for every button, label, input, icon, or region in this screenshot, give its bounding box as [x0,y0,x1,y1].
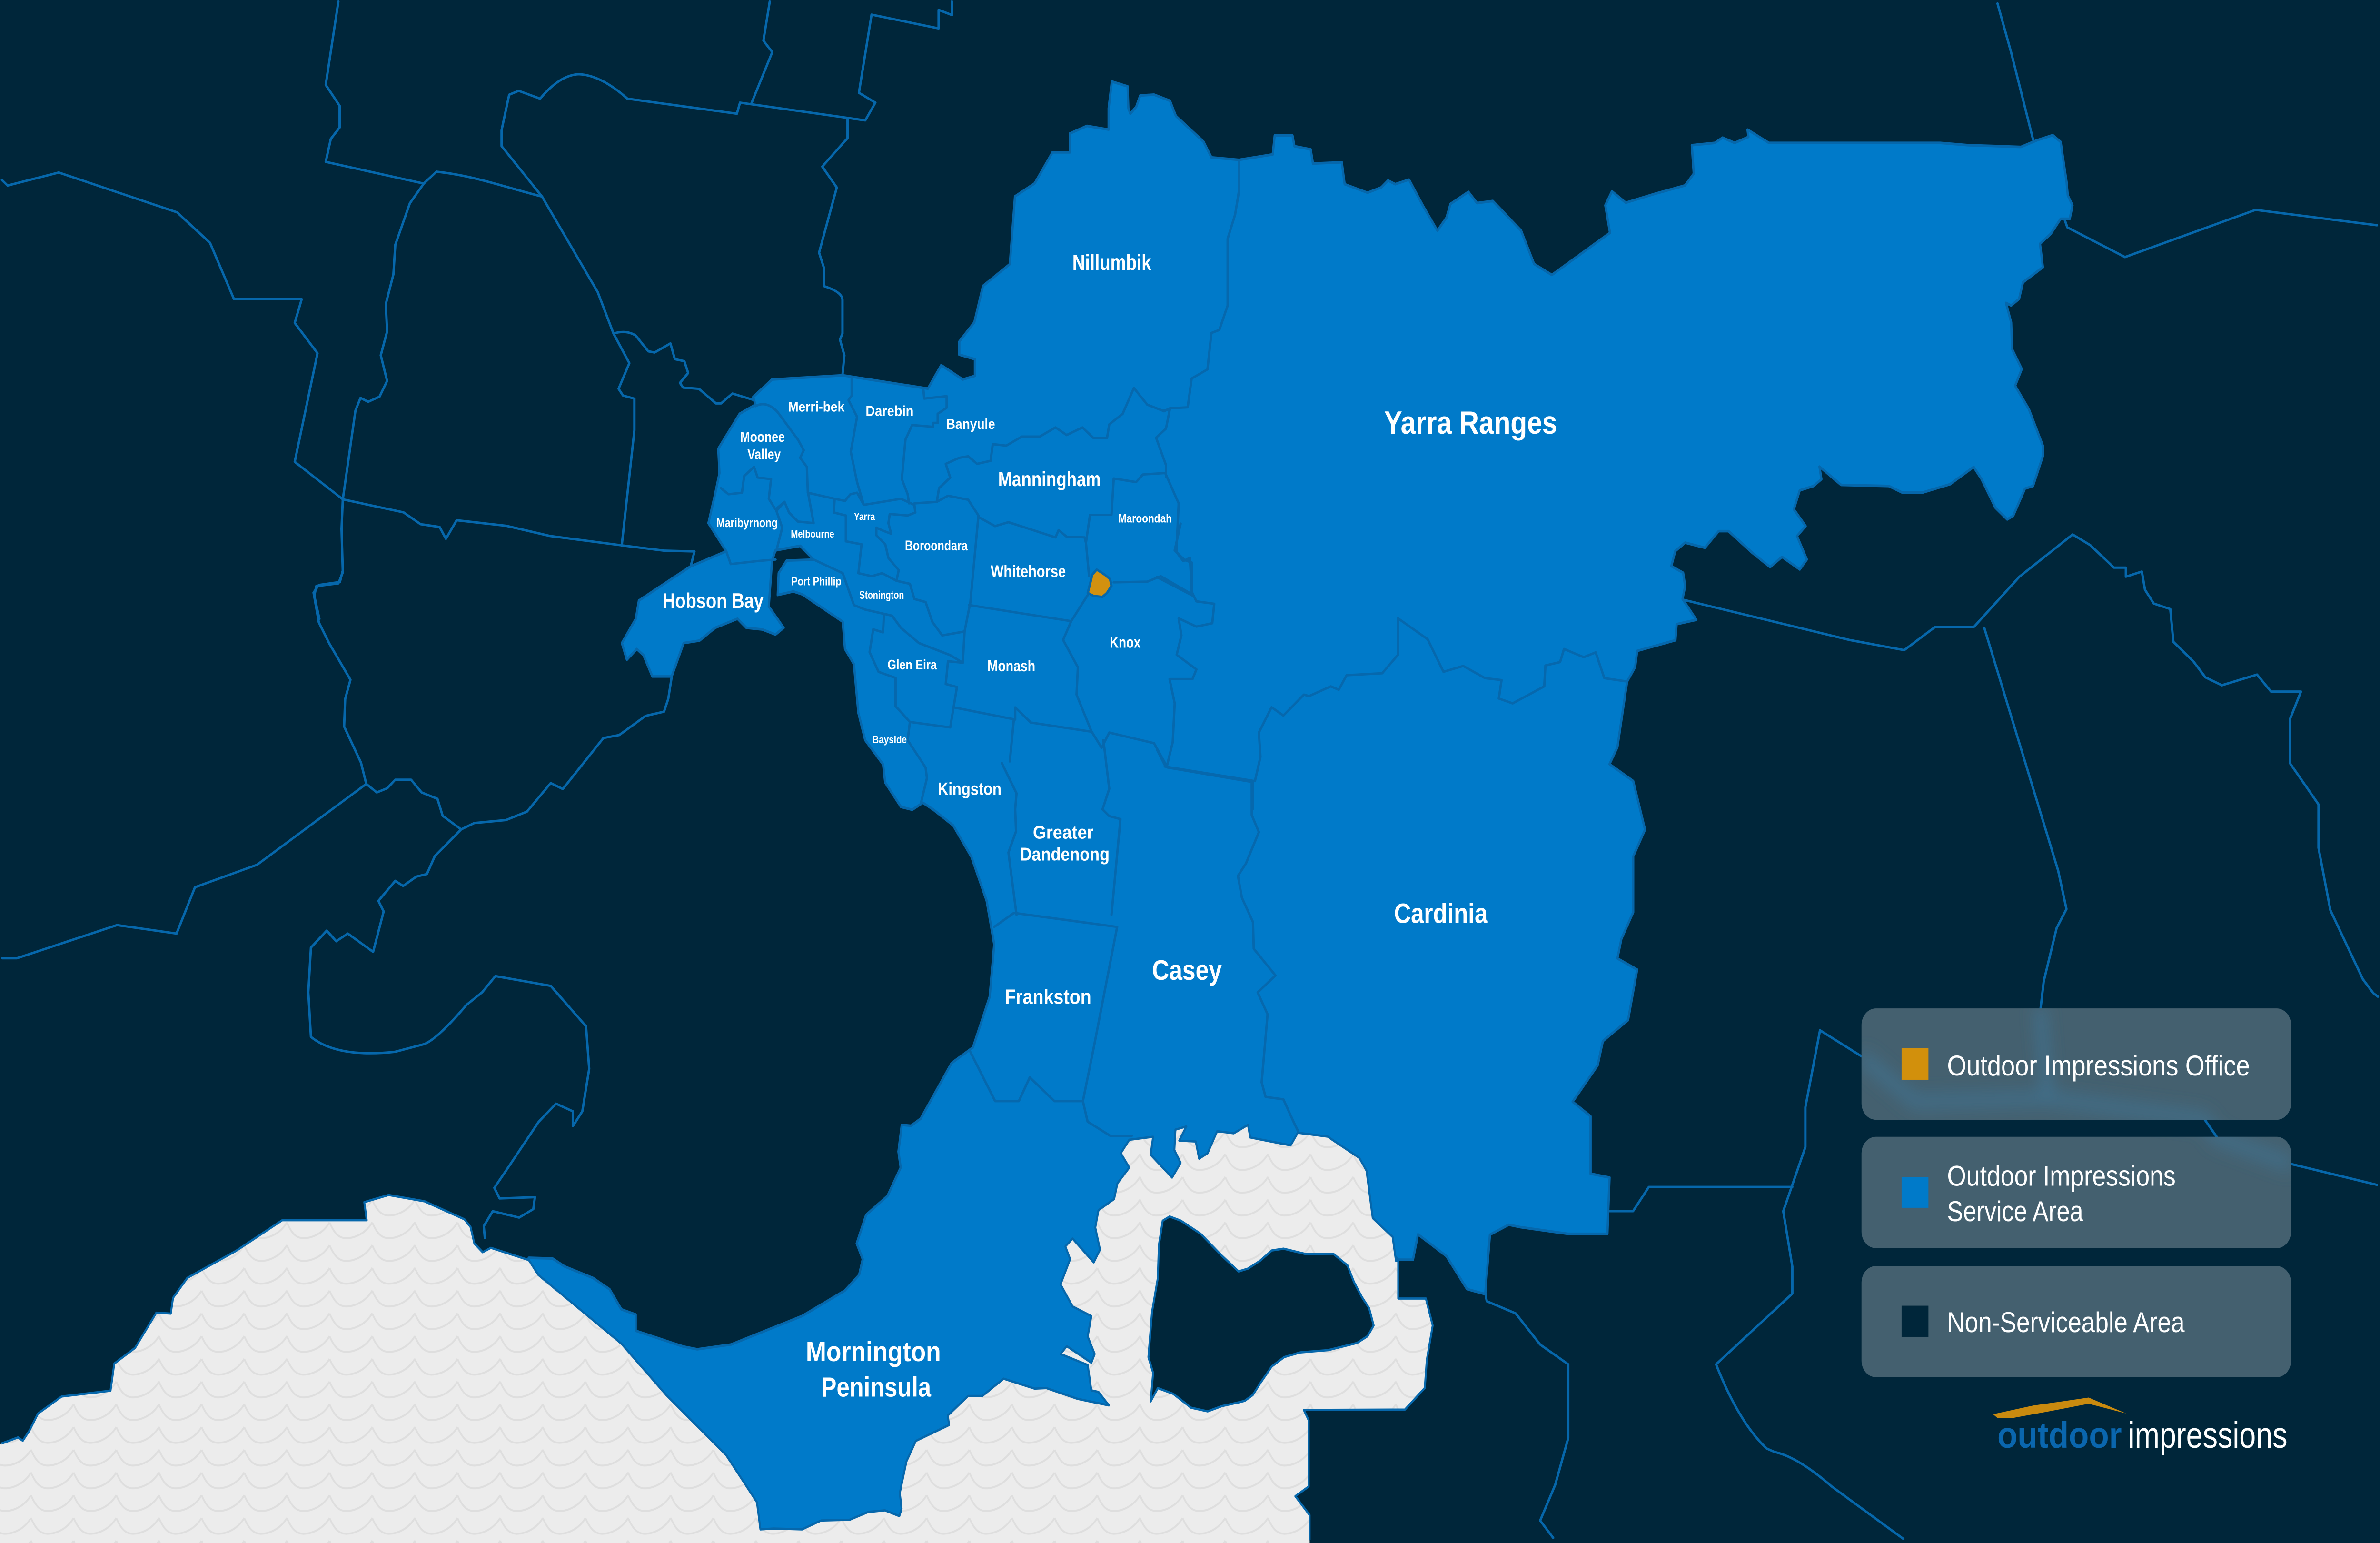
district labels: Cardinia [1394,897,1488,929]
service area: blue region [524,81,2073,1539]
logo: outdoor impressions [1993,1398,2287,1456]
district labels: Nillumbik [1072,251,1151,275]
district labels: Kingston [938,780,1002,799]
district labels: Mornington [806,1336,941,1367]
district labels: Frankston [1005,985,1091,1008]
district labels: Peninsula [821,1372,932,1403]
legend item: office: Outdoor Impressions Office [1947,1049,2250,1082]
district labels: Bayside [873,734,907,746]
district labels: Dandenong [1020,844,1110,865]
district labels: Maribyrnong [716,517,778,530]
legend [1861,1007,2292,1377]
logo: outdoor impressions: outdoor [1997,1415,2122,1456]
district labels: Manningham [998,468,1101,490]
district labels: Boroondara [905,538,968,553]
legend item: service area: Service Area [1947,1195,2083,1227]
district labels: Knox [1110,633,1141,651]
district labels: Darebin [866,403,913,419]
French Island: non-serviceable [1149,1216,1374,1411]
district labels: Moonee [740,428,785,445]
district labels: Monash [987,657,1035,675]
sea: light wave-patterned water [0,1125,1433,1543]
district labels: Melbourne [791,528,834,540]
council boundary lines inside service area [721,161,1627,1136]
district labels: Glen Eira [887,657,937,673]
district labels: Banyule [946,416,995,433]
legend item: non-serviceable: Non-Serviceable Area [1947,1306,2185,1338]
district labels: Maroondah [1118,512,1172,525]
district labels: Yarra [854,511,875,523]
district labels: Merri-bek [788,399,845,415]
district labels: Valley [747,446,781,462]
district labels: Hobson Bay [663,589,764,613]
district labels: Casey [1152,954,1222,986]
legend item: service area: Outdoor Impressions [1947,1160,2176,1192]
office location marker [1088,569,1111,597]
legend item: service area [1902,1160,2176,1227]
logo: outdoor impressions: impressions [2128,1415,2287,1456]
district labels [663,251,1557,1403]
district labels: Whitehorse [991,562,1066,581]
district labels: Port Phillip [791,575,842,588]
district labels: Greater [1033,822,1094,843]
district labels: Yarra Ranges [1384,405,1557,441]
district labels: Stonington [859,589,904,601]
